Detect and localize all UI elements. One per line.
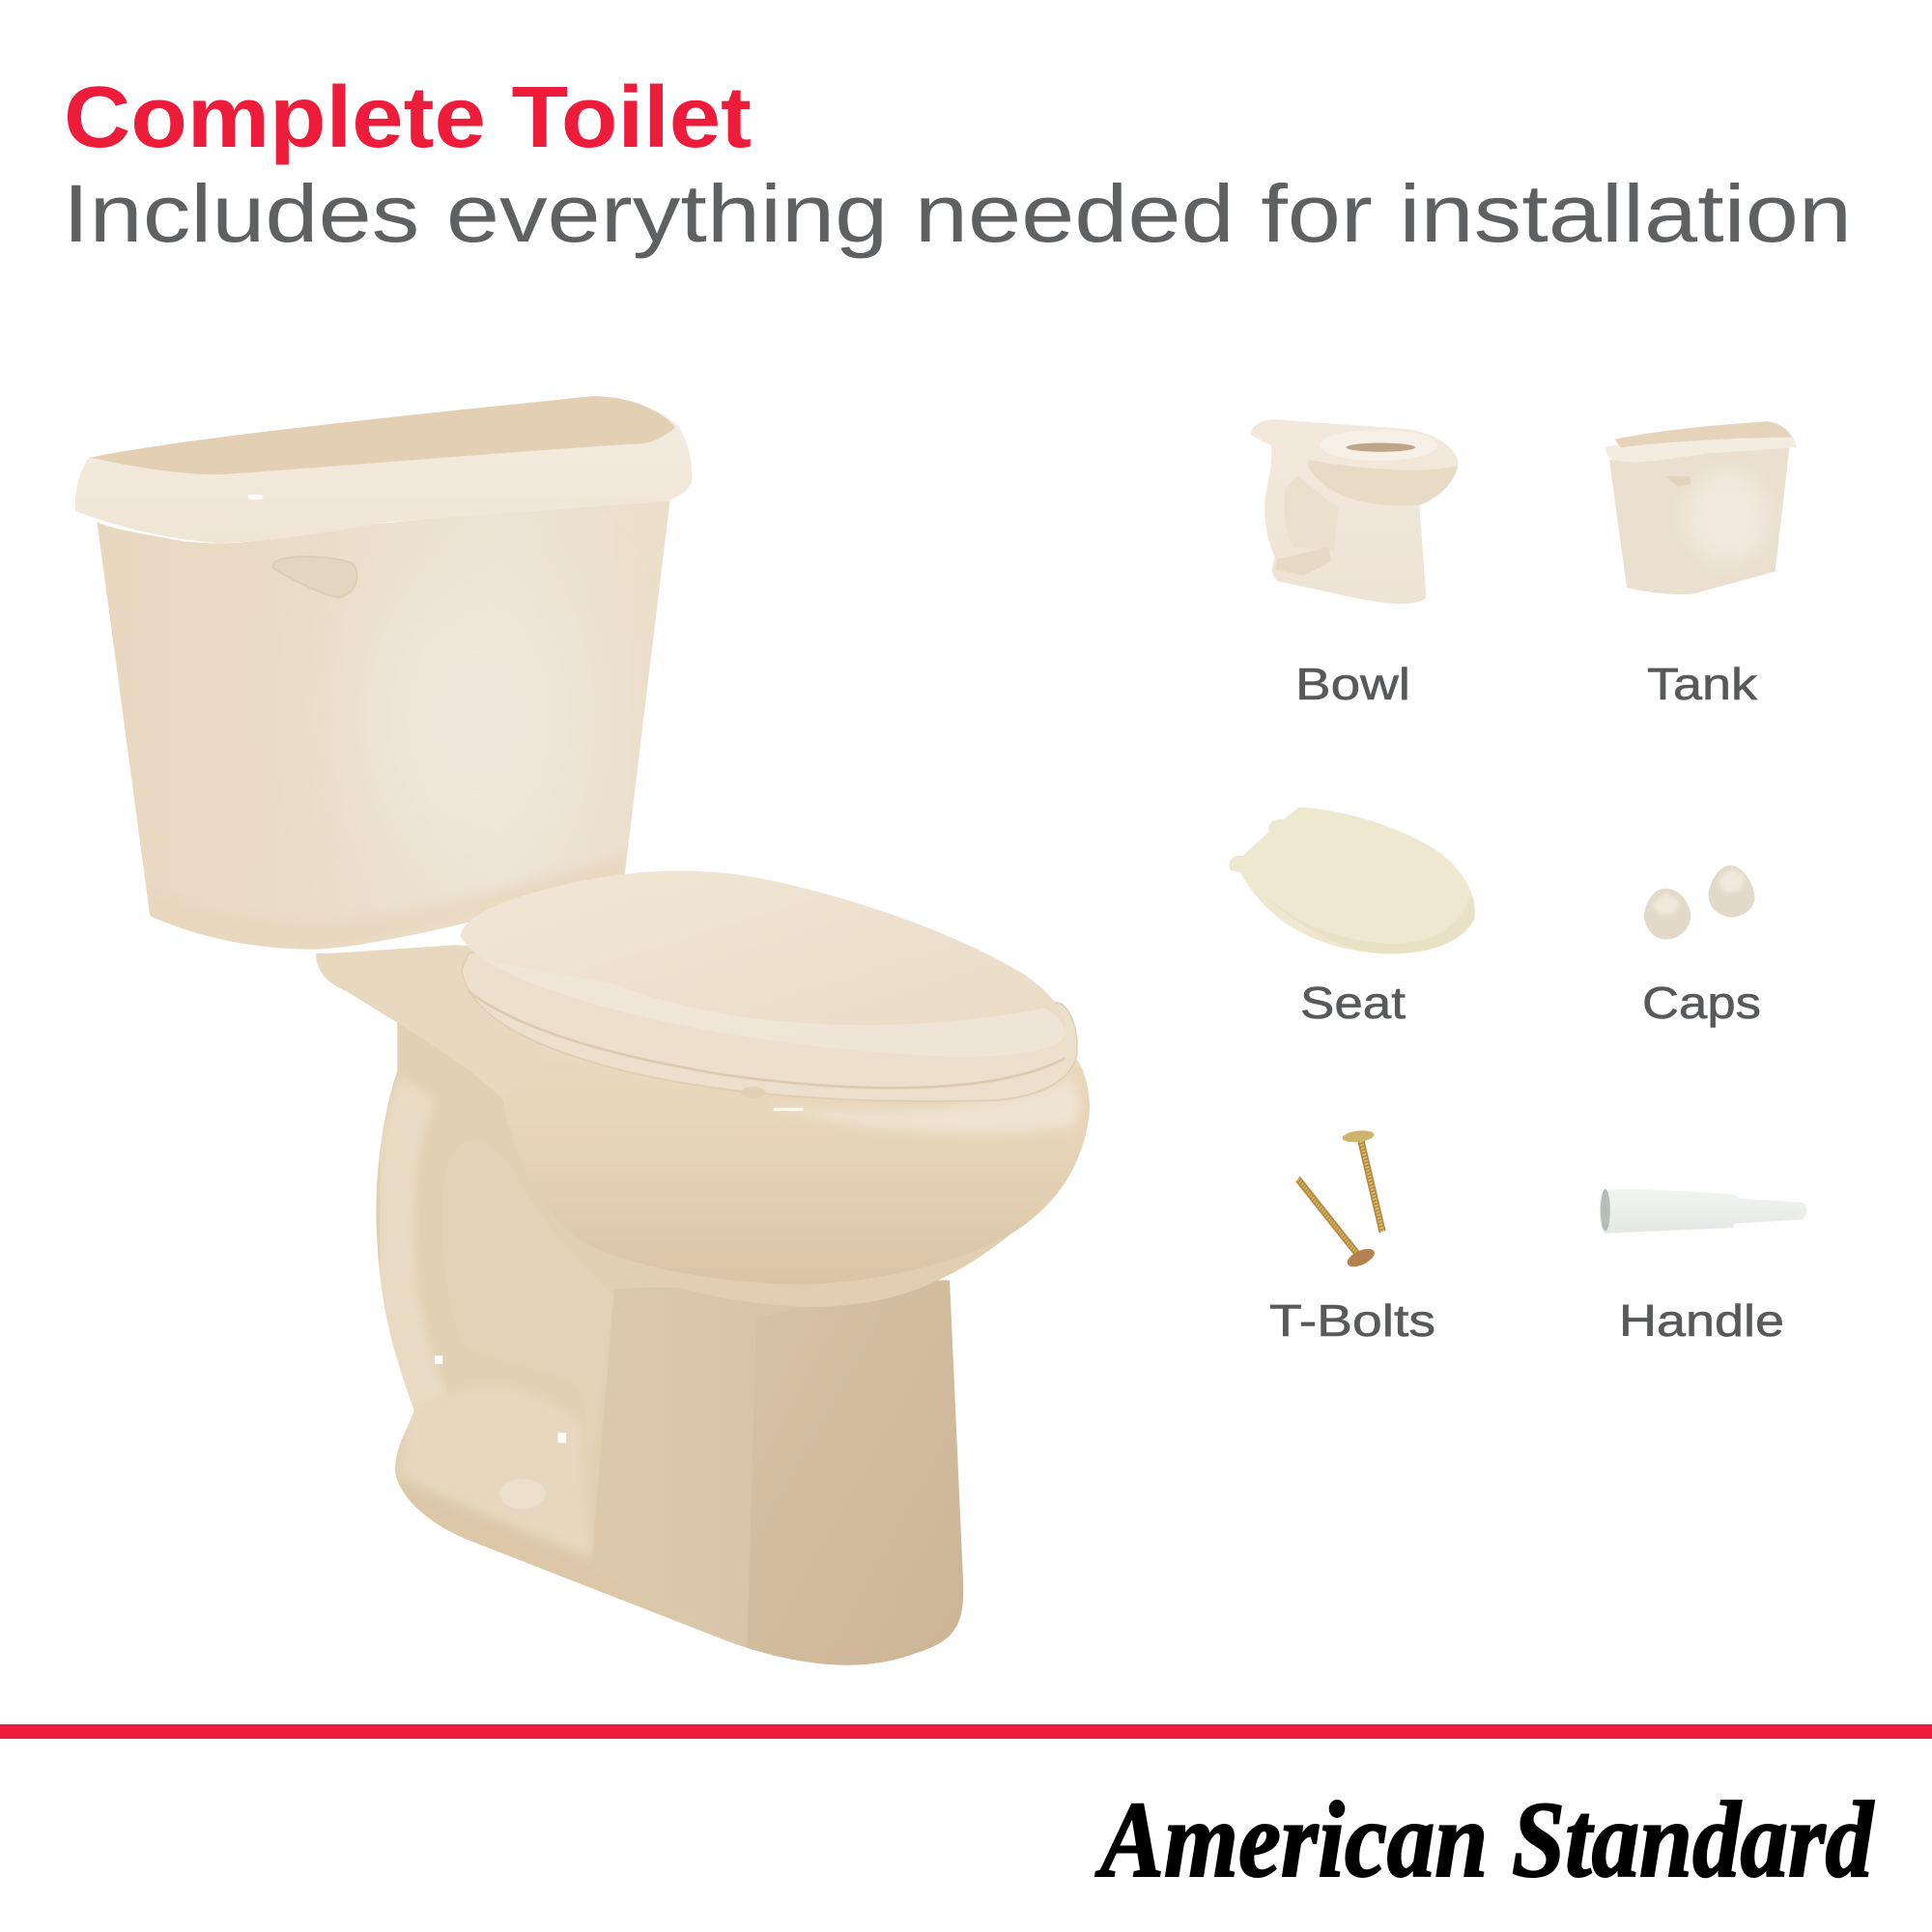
label: Caps: Caps <box>1642 978 1761 1028</box>
part: bowl picture <box>1251 419 1458 604</box>
subtitle: Includes everything needed for installation <box>63 168 1852 259</box>
main toilet illustration <box>75 396 1090 1674</box>
tank body <box>98 497 670 950</box>
tank lid <box>75 396 692 543</box>
toilet seat lid <box>461 870 1065 1057</box>
red divider bar <box>0 1724 1932 1739</box>
label: Bowl: Bowl <box>1295 659 1410 709</box>
title: Complete Toilet: Complete Toilet <box>64 70 752 166</box>
label: Handle: Handle <box>1619 1295 1784 1346</box>
label: Seat: Seat <box>1300 978 1406 1028</box>
rear neck of bowl <box>316 945 726 1122</box>
part: seat picture <box>1229 808 1475 953</box>
label: T-Bolts: T-Bolts <box>1269 1295 1435 1346</box>
toilet seat ring <box>462 912 1077 1101</box>
part: handle picture <box>1600 1189 1806 1234</box>
tank flush lever <box>273 556 357 598</box>
bowl <box>502 1004 1090 1307</box>
part: tank picture <box>1605 421 1797 594</box>
bowl base and pedestal <box>376 1020 970 1674</box>
part: caps picture <box>1644 866 1755 939</box>
label: Tank: Tank <box>1647 659 1758 709</box>
part: T-bolts picture <box>1298 1129 1382 1270</box>
